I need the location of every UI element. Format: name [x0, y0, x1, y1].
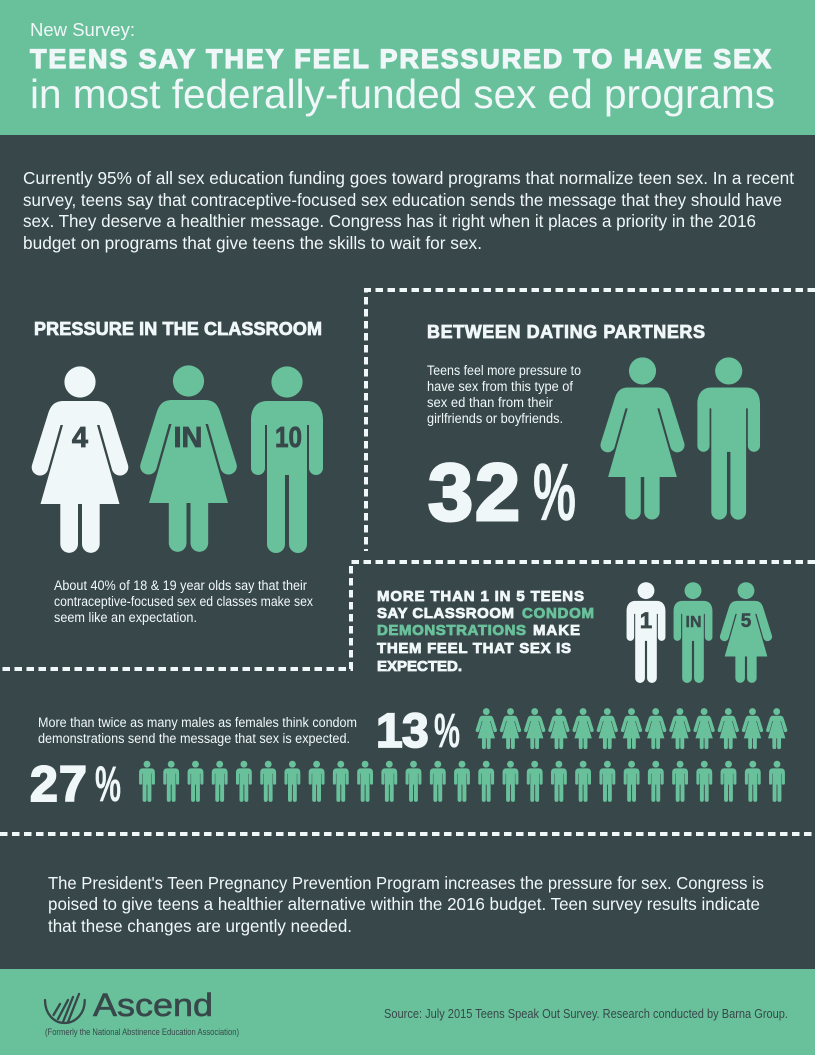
dating partners caption — [427, 363, 581, 426]
stat: 32%: % — [533, 448, 576, 538]
stat: 13%: % — [434, 705, 460, 758]
closing paragraph — [48, 873, 764, 936]
intro paragraph: Currently 95% of all sex education funding goes toward programs that normalize teen sex. In a recent — [23, 168, 794, 188]
caption: males versus females: More than twice as many males as females think condom — [38, 715, 357, 730]
icon: green male figure with 10 — [251, 366, 323, 553]
condom demonstrations text: DEMONSTRATIONS — [377, 622, 526, 639]
dating partners caption: Teens feel more pressure to — [427, 363, 581, 378]
condom demonstrations text: CONDOM — [522, 605, 594, 622]
footer — [0, 969, 815, 1055]
icon: green female figure with IN — [140, 365, 237, 552]
panel: between dating partners — [427, 322, 760, 538]
condom demonstrations text — [377, 588, 594, 675]
icon: white male figure with 1 — [627, 582, 665, 683]
icon: green male figure with IN: IN — [686, 614, 702, 631]
closing paragraph: poised to give teens a healthier alternative within the 2016 budget. Teen survey results indicate — [48, 894, 760, 914]
closing paragraph: The President's Teen Pregnancy Prevention Program increases the pressure for sex. Congress is — [48, 873, 764, 893]
stat: 27% — [30, 756, 121, 812]
panel: pressure in the classroom — [32, 319, 323, 625]
icon: white female figure with 4 — [32, 366, 128, 553]
icon: green male figure with 10: 10 — [275, 422, 302, 454]
condom demonstrations text: SAY CLASSROOM — [377, 605, 514, 622]
stat: 32%: 32 — [428, 448, 520, 538]
icon: green female figure with 5: 5 — [741, 611, 752, 632]
dating partners caption: have sex from this type of — [427, 379, 573, 394]
stat: 13% — [376, 705, 460, 758]
dating partners caption: sex ed than from their — [427, 395, 553, 410]
subtitle: in most federally-funded sex ed programs — [30, 71, 775, 117]
closing paragraph: that these changes are urgently needed. — [48, 916, 352, 936]
heading: between dating partners: BETWEEN DATING PARTNERS — [427, 322, 705, 342]
title: TEENS SAY THEY FEEL PRESSURED TO HAVE SEX — [30, 44, 771, 74]
caption: males versus females: demonstrations send the message that sex is expected. — [38, 731, 350, 746]
condom demonstrations text: MAKE — [533, 622, 580, 639]
condom demonstrations text: EXPECTED. — [377, 658, 462, 675]
condom demonstrations text: THEM FEEL THAT SEX IS — [377, 640, 571, 657]
dashed dividers — [0, 290, 815, 834]
icon: green female figure with 5 — [720, 582, 772, 683]
icon: green male figure with IN — [674, 582, 712, 683]
kicker: New Survey: New Survey: — [30, 20, 135, 40]
intro paragraph — [23, 168, 794, 253]
icon: green male figure — [697, 357, 760, 520]
icon: white male figure with 1: 1 — [640, 608, 652, 633]
panel: condom demonstrations — [377, 582, 772, 683]
classroom caption: About 40% of 18 & 19 year olds say that their — [54, 578, 307, 593]
icon: green female figure with IN: IN — [174, 422, 202, 454]
icon: white female figure with 4: 4 — [72, 422, 88, 454]
classroom caption: seem like an expectation. — [54, 610, 197, 625]
intro paragraph: budget on programs that give teens the skills to wait for sex. — [23, 233, 482, 253]
logo wordmark: Ascend: Ascend — [93, 987, 213, 1023]
stat: 13%: 13 — [376, 705, 429, 758]
logo tagline: (Formerly the National Abstinence Education Association) — [45, 1027, 239, 1038]
stat: 32% — [428, 448, 576, 538]
stat: 27%: 27 — [30, 756, 87, 812]
intro paragraph: survey, teens say that contraceptive-focused sex education sends the message that they should have — [23, 190, 782, 210]
icon: green female figure — [600, 357, 685, 520]
caption: males versus females — [38, 715, 357, 746]
pictogram: 13 female figures — [476, 708, 787, 749]
pictogram: 27 male figures — [139, 761, 785, 802]
intro paragraph: sex. They deserve a healthier message. Congress has it right when it places a priority in the 2016 — [23, 211, 756, 231]
header banner — [0, 0, 815, 135]
dating partners caption: girlfriends or boyfriends. — [427, 411, 563, 426]
classroom caption — [54, 578, 313, 625]
classroom caption: contraceptive-focused sex ed classes make sex — [54, 594, 313, 609]
condom demonstrations text: MORE THAN 1 IN 5 TEENS — [377, 588, 584, 605]
heading: pressure in the classroom: PRESSURE IN THE CLASSROOM — [34, 319, 322, 339]
stat: 27%: % — [95, 756, 121, 812]
icon: Ascend logo mark — [45, 994, 85, 1023]
